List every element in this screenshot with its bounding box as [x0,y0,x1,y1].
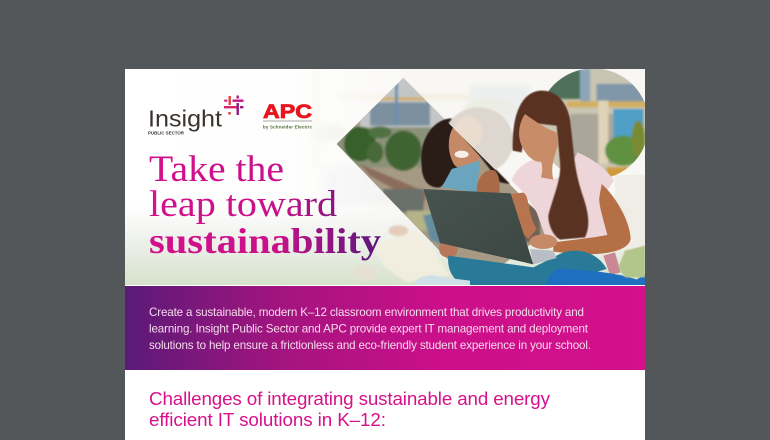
title [149,148,381,261]
APC wordmark: APC [263,101,312,123]
title line 3: sustainability [149,221,381,261]
faded upper head [448,107,513,170]
logo: APC by Schneider Electric [263,101,313,130]
faded photo background [125,69,645,285]
infographic page [125,69,645,440]
laughing girl face [449,127,480,169]
APC rule [263,120,312,122]
white page panel [125,69,645,440]
icon: main girl [439,91,631,258]
Public Sector tag: PUBLIC SECTOR [148,130,184,136]
face and neck [519,114,558,180]
intro text [149,306,591,352]
intro text: learning. Insight Public Sector and APC provide expert IT management and deployment [149,322,589,336]
jeans [448,251,607,286]
keyboard [530,249,557,264]
Insight mark [224,96,244,115]
section heading: efficient IT solutions in K–12: [149,409,386,430]
hero photo panel [125,69,650,289]
section heading [149,388,551,430]
shoulder [477,170,500,193]
icon: laughing girl [421,107,513,193]
plaid shirt tail [603,252,621,275]
right arm [553,184,631,254]
hair [513,91,588,240]
Schneider tag: by Schneider Electric [263,124,313,130]
intro band [125,286,645,370]
laughing girl hair [421,118,510,188]
title line 2: leap toward [149,183,337,224]
intro text: solutions to help ensure a frictionless and eco-friendly student experience in your school. [149,339,591,352]
laptop lid [423,189,533,264]
icon: laptop [423,189,557,264]
grass patch [618,246,645,277]
title line 1: Take the [149,148,284,189]
section heading: Challenges of integrating sustainable and energy [149,388,551,409]
sneaker [415,275,470,286]
photo diamond: shrubs and school building [336,78,544,264]
shirt [512,152,614,239]
icon: backpack [546,269,645,286]
laughing girl mouth [455,151,469,158]
hands [529,234,557,249]
photo circle: school exterior [538,69,645,177]
Insight wordmark: Insight [148,106,222,132]
intro text: Create a sustainable, modern K–12 classroom environment that drives productivity and [149,306,584,319]
faded seated girl legs [352,212,450,282]
logo: Insight Public Sector [148,96,244,136]
denim shirt [442,161,480,192]
left arm [511,192,537,239]
